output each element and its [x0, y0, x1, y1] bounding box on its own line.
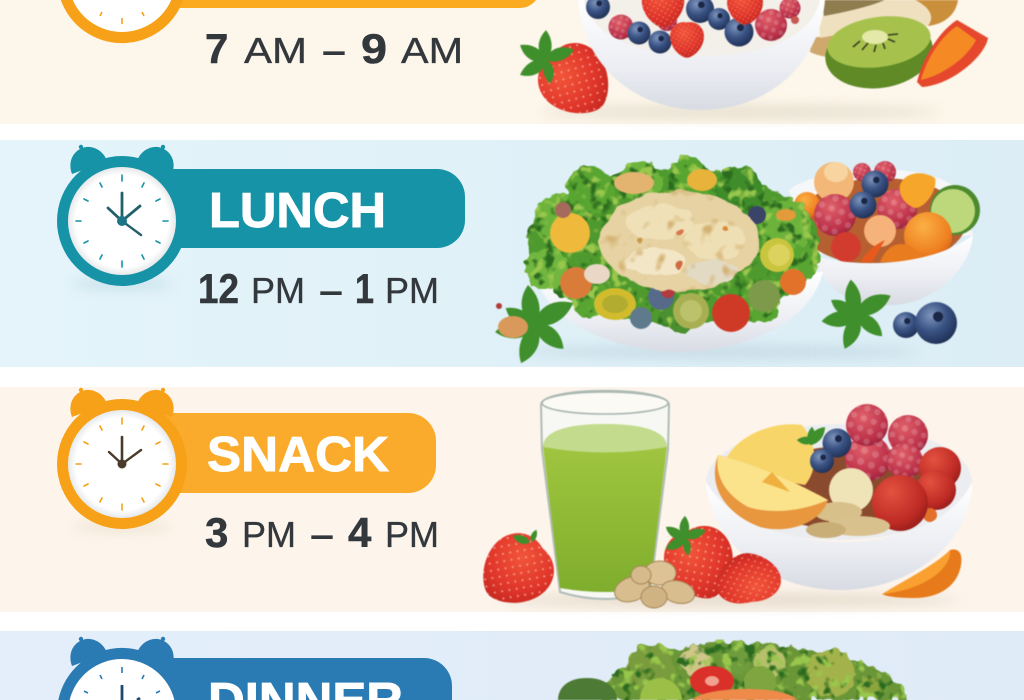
lunch time: PM — [251, 270, 305, 311]
dinner pill — [150, 658, 452, 700]
fruit bowl front — [812, 235, 973, 305]
breakfast time — [205, 25, 463, 72]
strawberry — [516, 30, 626, 131]
icon: lunch alarm clock — [57, 145, 187, 286]
snack time: 3 — [205, 509, 228, 556]
breakfast time: – — [322, 30, 346, 71]
herbs left with almond — [494, 284, 577, 367]
bowl front — [706, 482, 972, 590]
illustration: yogurt bowl, strawberry, bread, kiwi and orange — [516, 0, 988, 131]
kiwi — [821, 10, 937, 95]
apple wedge — [715, 455, 828, 529]
salad greens — [525, 156, 821, 332]
shadow — [520, 346, 920, 358]
breakfast background — [0, 0, 1024, 124]
illustration: green smoothie, strawberries, walnuts and fruit bowl — [466, 391, 972, 621]
broccoli — [558, 678, 617, 700]
glass of smoothie — [541, 391, 669, 599]
shadow — [540, 106, 940, 118]
white bowl — [578, 0, 825, 110]
breakfast time: 9 — [361, 25, 387, 72]
salad toppings — [550, 169, 806, 332]
panel: dinner — [0, 631, 1024, 700]
salmon — [692, 689, 797, 700]
red pepper — [690, 666, 734, 696]
icon: dinner alarm clock — [58, 637, 186, 700]
yogurt — [584, 0, 820, 56]
snack time — [205, 509, 439, 556]
snack label: SNACK — [207, 428, 389, 482]
fruit bowl — [706, 404, 972, 540]
lunch time — [198, 265, 439, 312]
breakfast pill — [150, 0, 540, 8]
panel: lunch — [0, 140, 1024, 367]
panel: breakfast — [0, 0, 1024, 131]
snack time: – — [310, 514, 334, 555]
lunch time: 1 — [355, 265, 374, 312]
lunch label: LUNCH — [209, 184, 386, 238]
clock shadow — [72, 522, 172, 532]
berries — [586, 0, 800, 58]
breakfast time: AM — [244, 30, 307, 71]
vegetables — [600, 642, 908, 700]
strawberry left — [466, 522, 565, 621]
icon: breakfast alarm clock — [61, 0, 183, 43]
herb right — [820, 278, 894, 352]
blueberries — [893, 302, 957, 344]
walnuts — [611, 561, 697, 608]
illustration: dinner plate with broccoli, tomato and salmon — [558, 642, 908, 700]
orange wedge — [917, 20, 988, 87]
panel: snack — [0, 387, 1024, 621]
salad plate — [535, 272, 823, 352]
snack background — [0, 387, 1024, 612]
snack pill — [150, 413, 436, 493]
breakfast time: 7 — [205, 25, 228, 72]
illustration: salad plate, fruit bowl, herbs and blueberries — [494, 156, 980, 367]
lunch background — [0, 140, 1024, 367]
strawberry right — [712, 549, 784, 607]
lunch time: – — [319, 270, 343, 311]
orange slice — [882, 550, 961, 598]
lunch time: 12 — [198, 265, 239, 312]
chicken mound — [599, 191, 759, 291]
greens center — [640, 666, 776, 700]
snack time: PM — [242, 514, 296, 555]
shadow — [500, 594, 960, 606]
snack time: 4 — [348, 509, 372, 556]
lunch pill — [150, 169, 465, 248]
clock shadow — [72, 279, 172, 289]
icon: snack alarm clock — [57, 388, 187, 529]
lunch time: PM — [385, 270, 439, 311]
dinner background — [0, 631, 1024, 700]
breakfast time: AM — [401, 30, 463, 71]
bread — [810, 0, 958, 58]
fruit bowl — [789, 161, 980, 266]
snack time: PM — [385, 514, 439, 555]
strawberry middle — [656, 516, 745, 609]
